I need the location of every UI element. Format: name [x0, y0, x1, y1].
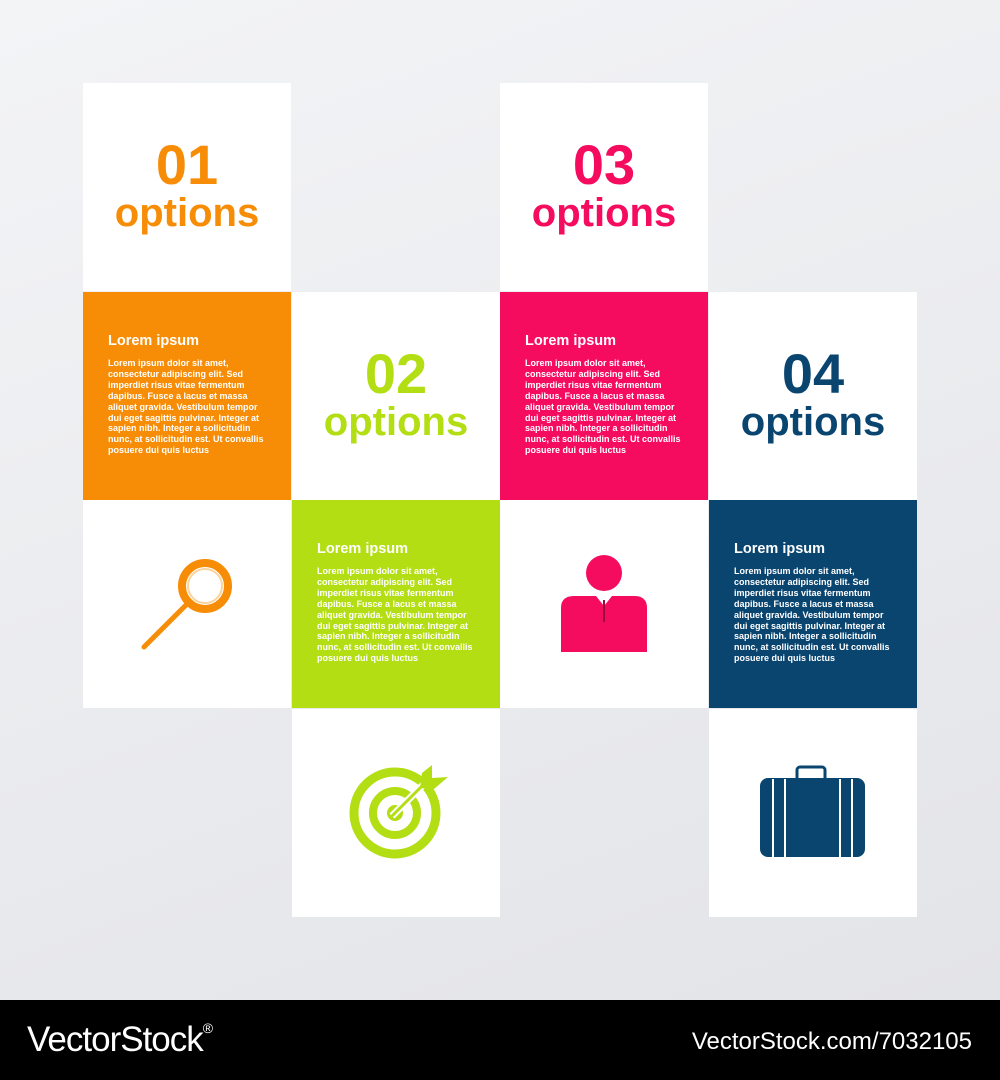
panel: person icon [500, 500, 708, 708]
panel: pink text: Lorem ipsum dolor sit amet, [525, 358, 646, 368]
panel: briefcase icon [709, 709, 917, 917]
panel: 04 options: 04 [782, 342, 844, 405]
panel: navy text: consectetur adipiscing elit. Sed [734, 577, 869, 587]
panel: orange text: imperdiet risus vitae fermentum [108, 380, 245, 390]
panel: pink text: Lorem ipsum [525, 333, 616, 349]
panel: 03 options [500, 83, 708, 291]
panel: pink text: imperdiet risus vitae fermentum [525, 380, 662, 390]
panel: orange text: consectetur adipiscing elit. Sed [108, 369, 243, 379]
panel: navy text: sapien nibh. Integer a sollicitudin [734, 631, 877, 641]
footer bar [0, 1000, 1000, 1080]
panel: 01 options: 01 [156, 133, 218, 196]
footer url: VectorStock.com/7032105 [692, 1028, 972, 1055]
panel: 03 options: 03 [573, 133, 635, 196]
panel: 04 options: options [741, 400, 885, 444]
panel: green text: posuere dui quis luctus [317, 653, 418, 663]
panel: navy text: dapibus. Fusce a lacus et massa [734, 599, 874, 609]
panel: orange text: posuere dui quis luctus [108, 445, 209, 455]
panel: 02 options: options [324, 400, 468, 444]
panel: orange text [83, 292, 291, 500]
panel: orange text: nunc, at sollicitudin est. Ut convallis [108, 434, 264, 444]
panel: orange text: sapien nibh. Integer a sollicitudin [108, 423, 251, 433]
panel: green text: nunc, at sollicitudin est. Ut convallis [317, 642, 473, 652]
panel: 02 options: 02 [365, 342, 427, 405]
panel: orange text: Lorem ipsum [108, 333, 199, 349]
panel: pink text: dapibus. Fusce a lacus et massa [525, 391, 665, 401]
panel: navy text: nunc, at sollicitudin est. Ut convallis [734, 642, 890, 652]
panel: pink text: consectetur adipiscing elit. Sed [525, 369, 660, 379]
panel: magnifier icon [83, 500, 291, 708]
panel: pink text: dui eget sagittis pulvinar. Integer at [525, 413, 676, 423]
panel: green text: dapibus. Fusce a lacus et massa [317, 599, 457, 609]
panel: navy text: posuere dui quis luctus [734, 653, 835, 663]
panel: green text: dui eget sagittis pulvinar. Integer at [317, 621, 468, 631]
panel: pink text: posuere dui quis luctus [525, 445, 626, 455]
panel: orange text: aliquet gravida. Vestibulum tempor [108, 402, 258, 412]
panel: 01 options: options [115, 191, 259, 235]
panel: 04 options [709, 292, 917, 500]
panel: navy text: imperdiet risus vitae fermentum [734, 588, 871, 598]
panel: pink text [500, 292, 708, 500]
panel: green text: Lorem ipsum dolor sit amet, [317, 566, 438, 576]
panel: green text: Lorem ipsum [317, 541, 408, 557]
panel: pink text: sapien nibh. Integer a sollicitudin [525, 423, 668, 433]
panel: green text: aliquet gravida. Vestibulum tempor [317, 610, 467, 620]
panel: navy text: Lorem ipsum [734, 541, 825, 557]
panel: navy text: Lorem ipsum dolor sit amet, [734, 566, 855, 576]
panel: navy text: aliquet gravida. Vestibulum tempor [734, 610, 884, 620]
panel: green text: sapien nibh. Integer a sollicitudin [317, 631, 460, 641]
panel: navy text [709, 500, 917, 708]
panel: green text [292, 500, 500, 708]
panel: 02 options [292, 292, 500, 500]
panel: pink text: nunc, at sollicitudin est. Ut convallis [525, 434, 681, 444]
panel: orange text: Lorem ipsum dolor sit amet, [108, 358, 229, 368]
panel: green text: imperdiet risus vitae fermentum [317, 588, 454, 598]
panel: orange text: dui eget sagittis pulvinar. Integer at [108, 413, 259, 423]
panel: navy text: dui eget sagittis pulvinar. Integer at [734, 621, 885, 631]
panel: pink text: aliquet gravida. Vestibulum tempor [525, 402, 675, 412]
panel: orange text: dapibus. Fusce a lacus et massa [108, 391, 248, 401]
footer logo: VectorStock® [27, 1020, 212, 1059]
panel: target icon [292, 709, 500, 917]
panel: 01 options [83, 83, 291, 291]
panel: green text: consectetur adipiscing elit. Sed [317, 577, 452, 587]
panel: 03 options: options [532, 191, 676, 235]
